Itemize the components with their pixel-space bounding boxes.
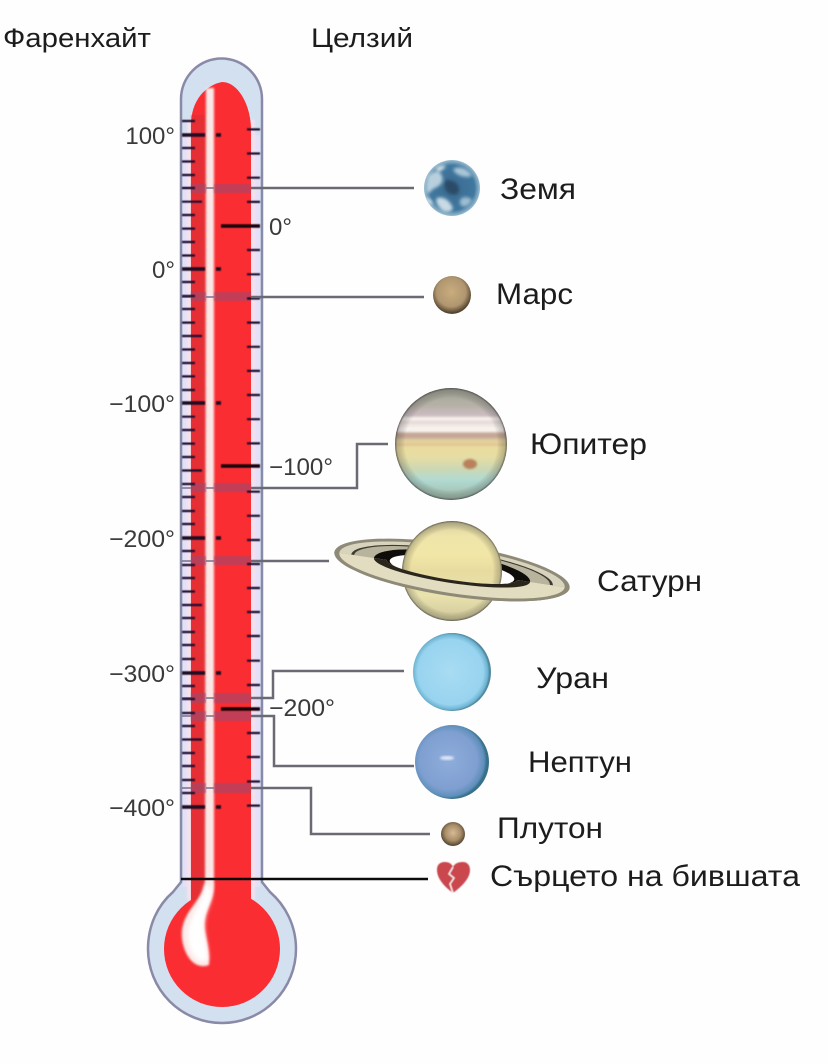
thermometer bbox=[148, 58, 296, 1023]
Celsius scale labels: −100° bbox=[269, 454, 333, 481]
planet: Jupiter bbox=[395, 388, 507, 500]
thermometer glass bbox=[148, 58, 296, 1023]
Fahrenheit scale labels: −200° bbox=[109, 526, 175, 553]
Fahrenheit scale labels: −400° bbox=[109, 795, 175, 822]
planet: Neptune bbox=[415, 725, 489, 799]
planet label: Pluto: Плутон bbox=[497, 812, 603, 845]
Fahrenheit scale labels: −300° bbox=[109, 661, 175, 688]
red column fill bbox=[191, 82, 251, 915]
Fahrenheit scale labels: 100° bbox=[125, 123, 175, 150]
Fahrenheit scale labels: −100° bbox=[109, 391, 175, 418]
planet label: Jupiter: Юпитер bbox=[530, 428, 647, 461]
Saturn rings back bbox=[330, 526, 574, 614]
Saturn globe bbox=[402, 521, 502, 621]
icon: broken heart bbox=[437, 862, 470, 893]
Fahrenheit major ticks bbox=[182, 135, 221, 807]
white highlight in bulb bbox=[188, 885, 212, 962]
label: ex's heart: Сърцето на бившата bbox=[490, 860, 800, 893]
thin marker lines across the glass bbox=[182, 188, 214, 788]
Saturn rings front bbox=[334, 552, 570, 602]
planet label: Saturn: Сатурн bbox=[597, 565, 702, 598]
Celsius major ticks bbox=[221, 226, 260, 709]
temperature marker bands bbox=[191, 184, 251, 793]
white glass stripe bbox=[182, 88, 214, 966]
Celsius scale labels bbox=[269, 214, 335, 722]
tube inner lavender bbox=[183, 135, 260, 887]
planet label: Earth: Земя bbox=[500, 173, 576, 206]
red bulb bbox=[164, 891, 280, 1007]
Celsius scale labels: −200° bbox=[269, 695, 335, 722]
planet label: Uranus: Уран bbox=[536, 662, 609, 695]
planet: Uranus bbox=[413, 633, 491, 711]
Fahrenheit scale labels bbox=[109, 123, 175, 822]
heading: Celsius: Целзий bbox=[311, 23, 413, 53]
Celsius scale labels: 0° bbox=[269, 214, 292, 241]
heading: Fahrenheit: Фаренхайт bbox=[3, 23, 151, 53]
Fahrenheit scale labels: 0° bbox=[152, 257, 175, 284]
planet: Earth bbox=[424, 160, 480, 216]
planet label: Mars: Марс bbox=[496, 278, 573, 311]
planet: Pluto bbox=[441, 822, 465, 846]
connector lines bbox=[251, 188, 430, 834]
Fahrenheit ticks bbox=[182, 121, 202, 793]
planet: Saturn bbox=[330, 521, 574, 621]
pale halo around liquid bbox=[187, 120, 255, 900]
planet label: Neptune: Нептун bbox=[528, 746, 632, 779]
Celsius ticks bbox=[247, 129, 260, 806]
left column shade bbox=[191, 115, 206, 900]
planet: Mars bbox=[433, 276, 471, 314]
connector line to heart bbox=[181, 878, 428, 880]
